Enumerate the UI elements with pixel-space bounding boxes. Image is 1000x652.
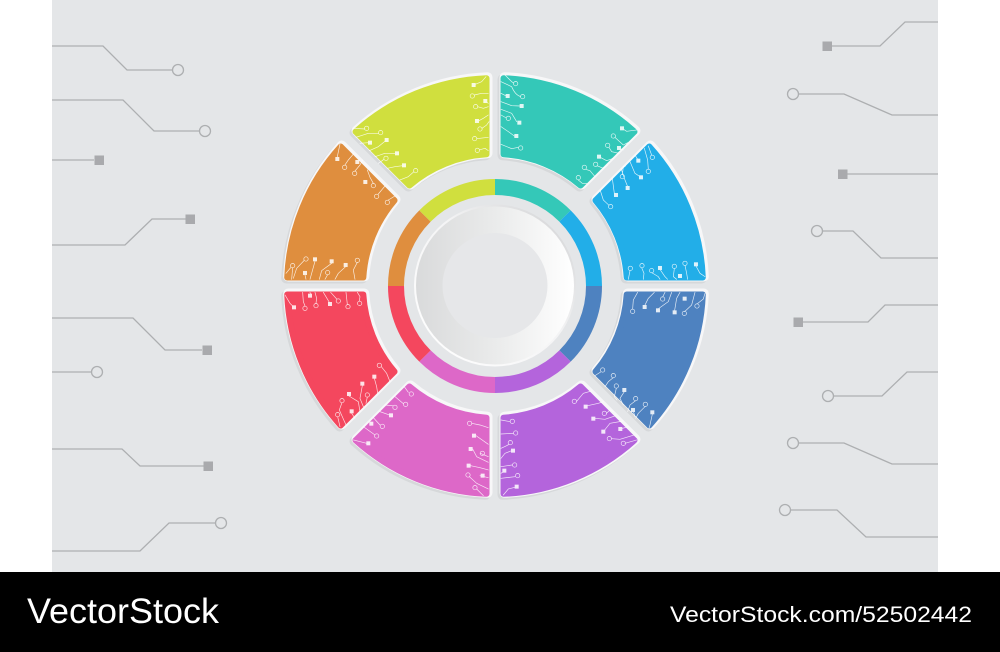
segment: purple: [501, 385, 637, 495]
circuit trace right 7: [788, 438, 938, 464]
circuit trace right 4: [812, 226, 938, 258]
image url text: VectorStock.com/52502442: [670, 602, 972, 627]
circuit trace left 6: [52, 366, 102, 378]
circuit trace left 2: [52, 100, 210, 136]
segment: orange: [286, 144, 396, 279]
circuit trace right 6: [822, 372, 938, 402]
colour ring: [396, 187, 594, 385]
brand wordmark: VectorStock: [27, 592, 220, 631]
segment: teal: [501, 75, 637, 187]
centre inner circle: [442, 233, 548, 338]
right circuit lines: [780, 22, 938, 537]
circuit trace right 1: [822, 22, 938, 51]
circuit trace left 5: [52, 318, 212, 355]
background panel: [52, 0, 938, 572]
footer bar: [0, 572, 1000, 652]
circuit trace right 5: [794, 305, 938, 327]
panel: eight outer segments: [285, 75, 705, 496]
segment: red: [285, 292, 396, 427]
circuit trace left 3: [52, 156, 104, 165]
centre disc: [414, 204, 576, 366]
circuit trace left 8: [52, 518, 226, 551]
circuit trace right 2: [788, 88, 938, 115]
segment: lime: [353, 77, 489, 187]
segment: pink: [353, 385, 488, 496]
circuit trace right 3: [838, 170, 938, 179]
segment: steel blue: [594, 292, 705, 428]
segment: sky blue: [594, 146, 705, 279]
circuit trace left 7: [52, 449, 213, 471]
circuit trace right 8: [780, 504, 938, 537]
circuit trace left 4: [52, 214, 195, 245]
left circuit lines: [52, 46, 226, 551]
circuit trace left 1: [52, 46, 184, 76]
